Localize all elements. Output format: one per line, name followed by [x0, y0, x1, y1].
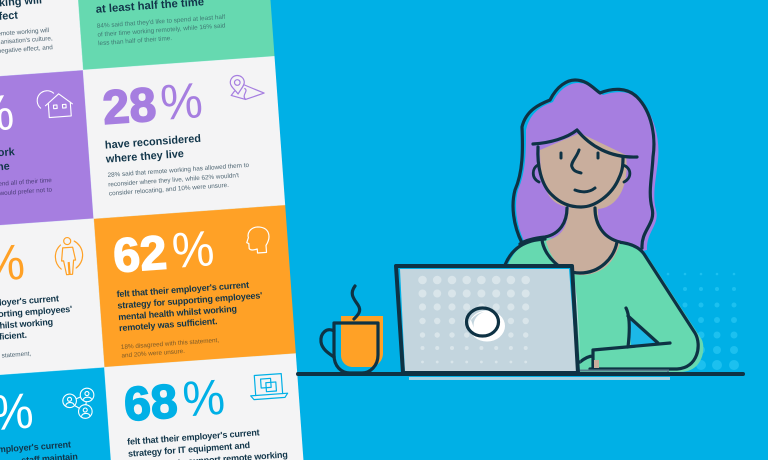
body text: 28% cell: 28% said that remote working has allowed them to — [107, 162, 250, 179]
body text: 62% cell: and 20% were unsure. — [121, 348, 185, 359]
heading: left grey cell — [0, 292, 74, 343]
icon: laptop with windows — [249, 373, 288, 400]
panel: blue left cell — [0, 367, 115, 460]
statistic: 68% — [122, 369, 227, 432]
body text: teal cell: less than half of their time. — [98, 35, 173, 47]
heading: have reconsidered where they live: have reconsidered — [105, 133, 201, 152]
body text: 62% cell — [121, 337, 220, 359]
panel: left grey cell with figure — [0, 219, 104, 381]
laptop logo — [466, 308, 505, 342]
statistic: 28%: % — [159, 72, 204, 131]
desk line — [298, 370, 743, 380]
icon: house and circle — [37, 89, 73, 118]
body text: teal cell — [97, 14, 227, 47]
statistic: 68%: 68 — [122, 375, 179, 432]
heading: have reconsidered where they live — [104, 133, 202, 166]
panel: orange 62% cell — [94, 205, 296, 367]
panel: purple cell — [0, 70, 94, 232]
body text: top left — [0, 27, 54, 55]
panel: teal cell — [72, 0, 275, 70]
statistic: 62%: 62 — [112, 227, 169, 283]
panel: 28% cell — [83, 56, 285, 219]
heading: 62% statement: strategy for supporting employees' — [117, 290, 263, 311]
heading: blue left cell — [0, 439, 78, 460]
icon: map pin — [230, 74, 264, 100]
head and neck — [520, 130, 637, 275]
steam — [352, 286, 360, 319]
body text: 28% cell: reconsider where they live, while 62% wouldn't — [108, 172, 239, 188]
heading: 62% statement: mental health whilst working — [118, 304, 237, 322]
body text: purple cell: would prefer not to — [0, 186, 53, 197]
laptop dots — [418, 276, 530, 363]
panel: top left grey cell — [0, 0, 83, 84]
body text: 28% cell: consider relocating, and 10% were unsure. — [109, 182, 229, 197]
heading: purple cell — [0, 146, 17, 174]
heading: 68% statement: felt that their employer's current — [127, 427, 260, 447]
heading: 68% statement: strategy for IT equipment and — [128, 440, 250, 459]
body text: 62% cell: 18% disagreed with this statement, — [121, 337, 220, 351]
heading: have reconsidered where they live: where they live — [105, 148, 184, 166]
coffee mug — [321, 286, 383, 373]
statistic: 68%: % — [181, 369, 227, 428]
body text: teal cell: 84% said that they'd like to spend at least half — [97, 14, 226, 30]
icon: head — [246, 226, 270, 254]
statistic: 62%: % — [170, 220, 216, 279]
dot pattern — [664, 273, 739, 370]
heading: 62% statement: remotely was sufficient. — [119, 316, 218, 333]
icon: people network — [62, 388, 95, 420]
statistic: 62% — [111, 220, 216, 283]
heading: 62% statement: felt that their employer's current — [116, 280, 249, 299]
illustration: woman at laptop — [298, 80, 743, 380]
statistic: 28%: 28 — [101, 78, 158, 135]
icon: person with ring — [54, 237, 84, 275]
body text: teal cell: of their time working remotely, while 16% said — [97, 22, 226, 39]
heading: 68% statement — [127, 425, 288, 460]
statistic: 28% — [101, 72, 204, 135]
heading: 62% statement — [116, 279, 264, 333]
laptop — [396, 266, 581, 373]
body: green jumper — [505, 238, 703, 372]
heading: top left — [0, 0, 43, 24]
infographic sheet — [0, 0, 306, 460]
body text: 28% cell — [107, 162, 251, 197]
hair — [513, 80, 658, 260]
panel: 68% cell — [104, 354, 306, 460]
body text: purple cell — [0, 177, 53, 198]
